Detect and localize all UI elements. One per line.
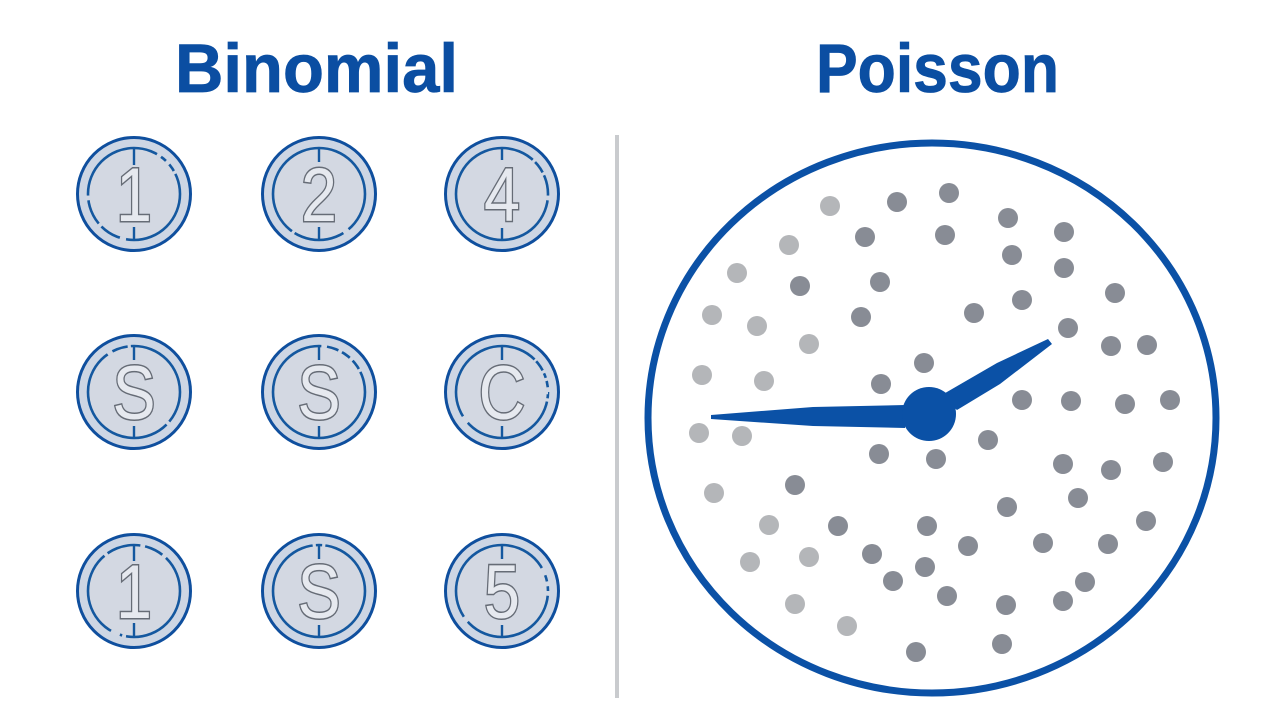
coin: S: S <box>112 350 156 435</box>
coin: 5: 5 <box>484 549 520 634</box>
coin: 4: 4 <box>484 152 520 237</box>
panel: poisson clock <box>648 143 1216 693</box>
event dots <box>785 183 1180 662</box>
coin: C <box>446 336 558 448</box>
coin: 5 <box>446 534 558 648</box>
panel: binomial coin grid <box>78 138 558 648</box>
coin: 4 <box>446 138 558 250</box>
coin: 1 <box>78 138 190 250</box>
faded event dots <box>689 196 857 636</box>
coin: S: S <box>297 350 341 435</box>
clock hands <box>711 339 1052 441</box>
coin: S <box>262 336 376 448</box>
coin: 2 <box>262 138 376 250</box>
title: Binomial: Binomial <box>175 30 458 107</box>
coin: 1 <box>78 534 190 648</box>
coin: 1: 1 <box>116 549 152 634</box>
divider between panels <box>615 135 619 698</box>
coin: 1: 1 <box>116 152 152 237</box>
coin: S <box>262 534 376 648</box>
clock outline <box>648 143 1216 693</box>
coin: C: C <box>479 350 525 435</box>
coin: S: S <box>297 549 341 634</box>
coin: 2: 2 <box>301 152 337 237</box>
title: Poisson: Poisson <box>816 30 1059 107</box>
coin: S <box>78 336 190 448</box>
